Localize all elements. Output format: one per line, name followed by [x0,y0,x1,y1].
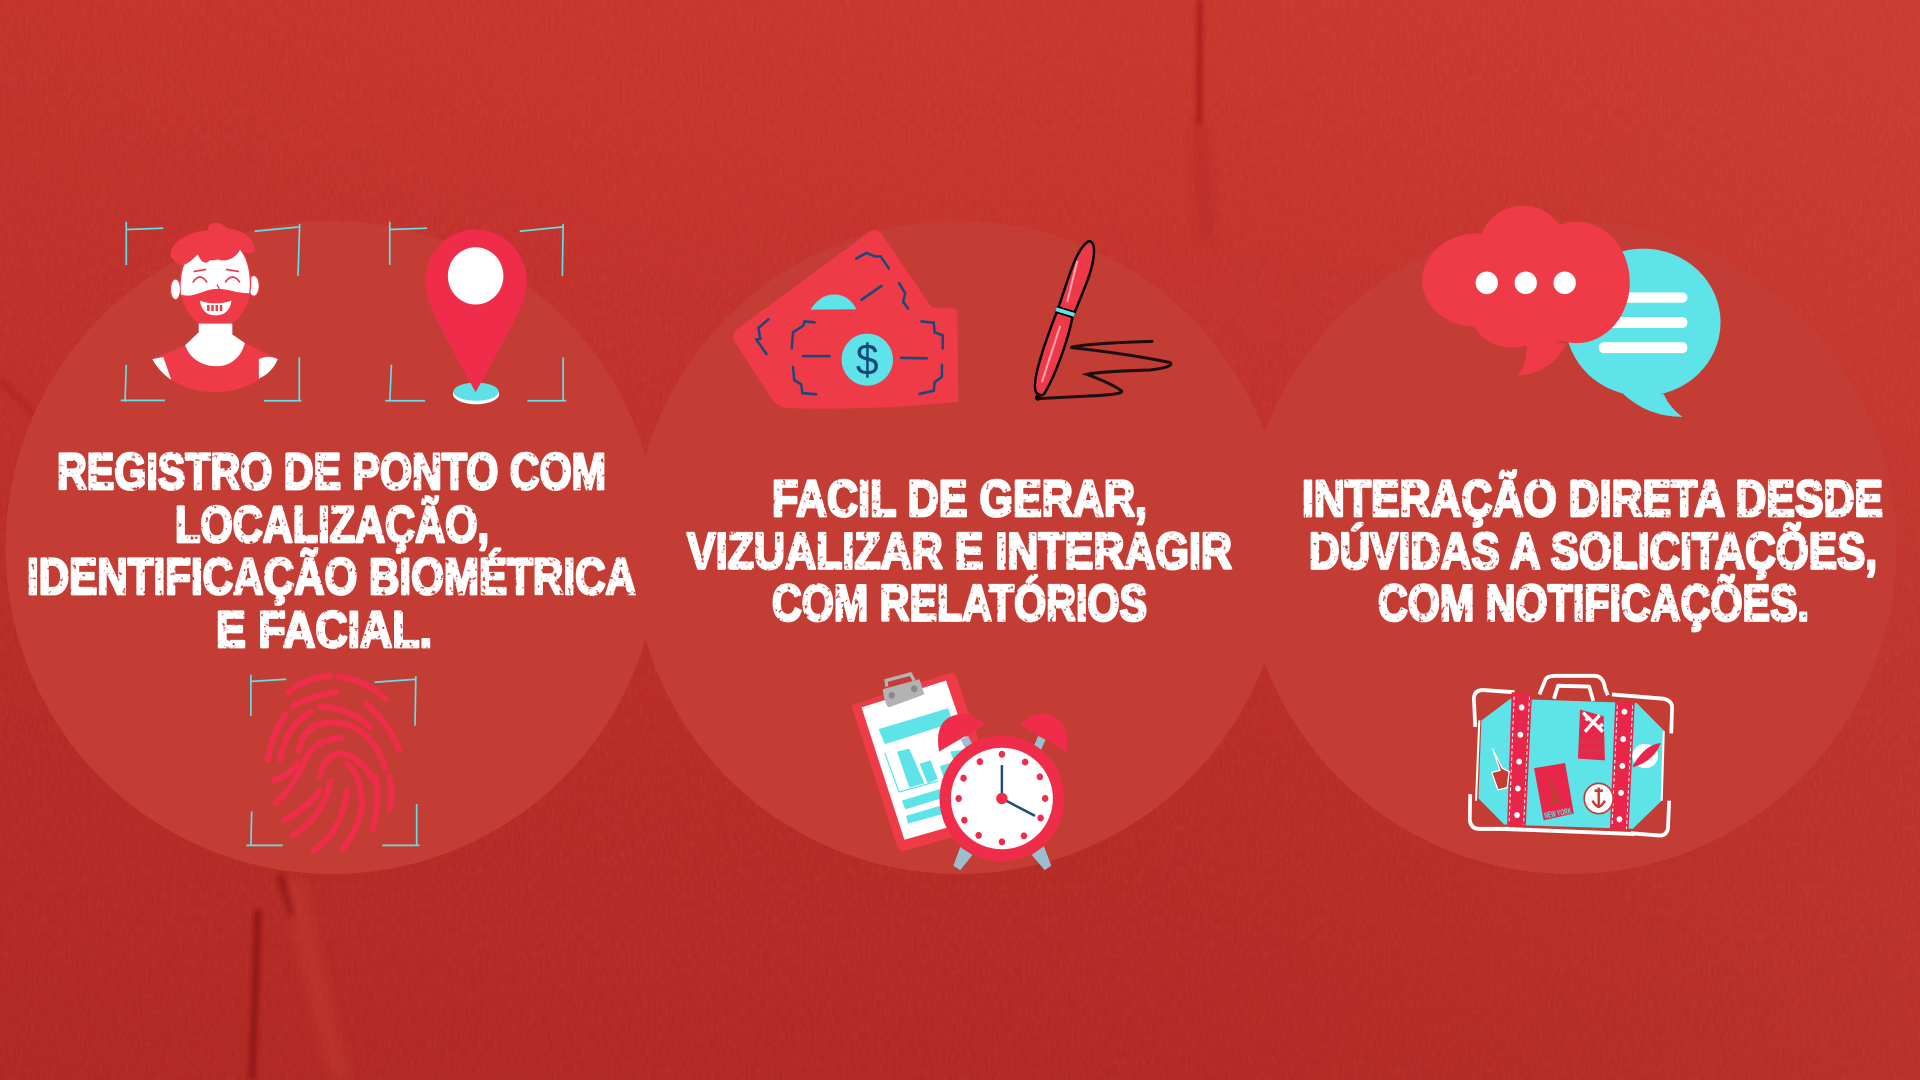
icon: clipboard report [851,673,987,851]
text block: registro de ponto [27,443,636,658]
text block: relatórios: COM RELATÓRIOS [772,574,1147,632]
text block: interação direta: COM NOTIFICAÇÕES. [1378,574,1809,632]
icon: travel suitcase: NEW YORK [1543,805,1573,820]
text block: registro de ponto: LOCALIZAÇÃO, [175,495,489,553]
panel: right icons [1422,206,1721,836]
icon: fingerprint with scan frame [246,675,420,851]
icon: location pin with scan frame [385,222,566,404]
icon: banknotes: $ [856,335,879,384]
panel: middle icons [733,230,1171,870]
text block: interação direta [1302,469,1883,632]
icon: alarm clock [938,714,1067,870]
text block: registro de ponto: E FACIAL. [216,601,432,658]
icon: smiling face with scan frame [121,222,301,402]
text block: relatórios: VIZUALIZAR E INTERAGIR [687,522,1232,580]
panel: three overlapping circles [6,221,1896,874]
text block: registro de ponto: IDENTIFICAÇÃO BIOMÉTRICA [27,547,636,605]
icon: speech bubbles [1422,206,1721,417]
text block: registro de ponto: REGISTRO DE PONTO COM [57,443,606,500]
icon: banknotes [733,230,958,409]
text block: relatórios [687,470,1232,632]
text block: relatórios: FACIL DE GERAR, [772,470,1147,527]
icon: travel suitcase [1470,676,1672,836]
panel: left icons [121,222,566,851]
icon: pen with signature [1035,241,1171,401]
